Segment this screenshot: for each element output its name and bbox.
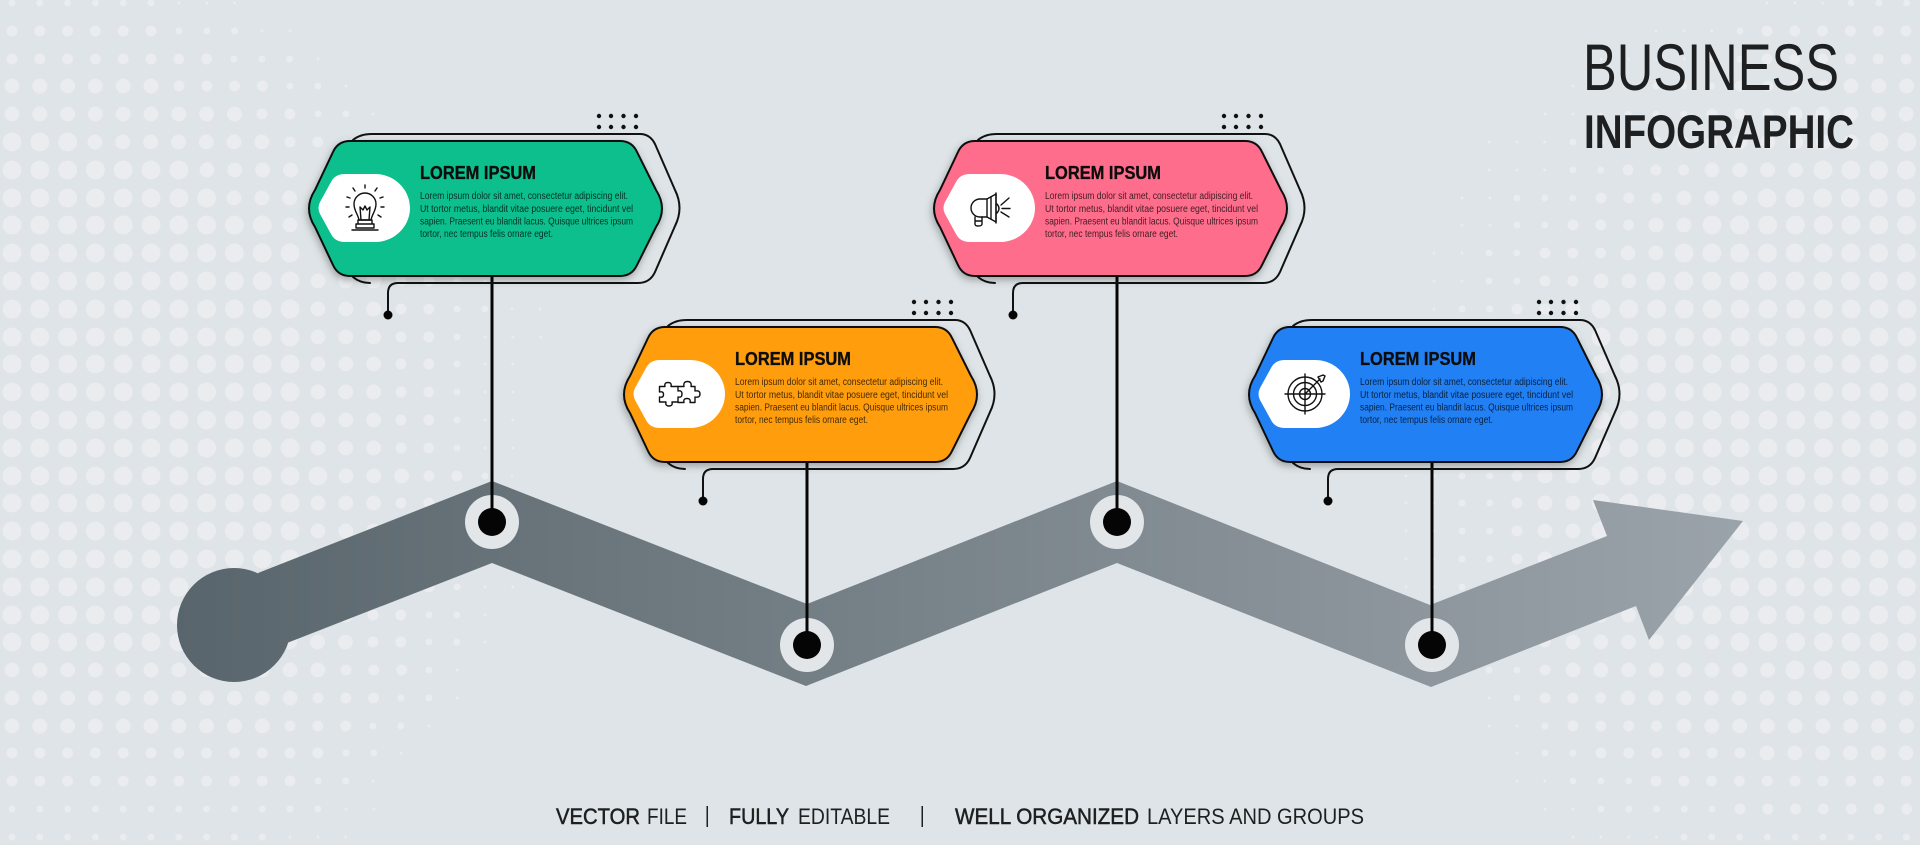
footer tagline: WELL ORGANIZED [955, 804, 1139, 829]
milestone 4 marker [1405, 462, 1459, 672]
icon: target [1285, 374, 1325, 414]
icon: puzzle [660, 382, 700, 406]
description: sapien. Praesent eu blandit lacus. Quisque ultrices ipsum [735, 402, 948, 414]
description: sapien. Praesent eu blandit lacus. Quisque ultrices ipsum [420, 216, 633, 228]
panel: orange card [624, 300, 994, 506]
description: Ut tortor metus, blandit vitae posuere eget, tincidunt vel [1045, 204, 1258, 215]
heading: LOREM IPSUM [735, 349, 851, 369]
panel: pink card [934, 114, 1304, 320]
heading: LOREM IPSUM [1360, 349, 1476, 369]
description: tortor, nec tempus felis ornare eget. [735, 415, 868, 426]
icon: light bulb [346, 185, 384, 230]
footer tagline: LAYERS AND GROUPS [1147, 804, 1364, 829]
icon: megaphone [971, 193, 1010, 226]
description: tortor, nec tempus felis ornare eget. [1045, 229, 1178, 240]
heading: LOREM IPSUM [420, 163, 536, 183]
heading: LOREM IPSUM [1045, 163, 1161, 183]
description: sapien. Praesent eu blandit lacus. Quisque ultrices ipsum [1360, 402, 1573, 414]
title: BUSINESS [1583, 30, 1839, 104]
footer tagline: VECTOR [556, 804, 640, 829]
description: Lorem ipsum dolor sit amet, consectetur adipiscing elit. [1360, 377, 1568, 388]
description: Ut tortor metus, blandit vitae posuere eget, tincidunt vel [735, 390, 948, 401]
description [420, 191, 633, 240]
milestone 3 marker [1090, 276, 1144, 549]
description [735, 377, 948, 426]
footer tagline: FILE [647, 804, 687, 829]
zigzag arrow [177, 481, 1743, 687]
description [1045, 191, 1258, 240]
description: tortor, nec tempus felis ornare eget. [420, 229, 553, 240]
description: Lorem ipsum dolor sit amet, consectetur adipiscing elit. [735, 377, 943, 388]
footer tagline: EDITABLE [798, 804, 890, 829]
milestone 2 marker [780, 462, 834, 672]
description: Ut tortor metus, blandit vitae posuere eget, tincidunt vel [1360, 390, 1573, 401]
description [1360, 377, 1573, 426]
title [1583, 30, 1854, 158]
title: INFOGRAPHIC [1584, 105, 1854, 158]
description: Ut tortor metus, blandit vitae posuere eget, tincidunt vel [420, 204, 633, 215]
description: tortor, nec tempus felis ornare eget. [1360, 415, 1493, 426]
description: Lorem ipsum dolor sit amet, consectetur adipiscing elit. [420, 191, 628, 202]
footer tagline: FULLY [729, 804, 789, 829]
footer tagline [556, 804, 1364, 829]
panel: green card [309, 114, 680, 320]
panel: blue card [1249, 300, 1620, 506]
description: Lorem ipsum dolor sit amet, consectetur adipiscing elit. [1045, 191, 1253, 202]
milestone 1 marker [465, 276, 519, 549]
description: sapien. Praesent eu blandit lacus. Quisque ultrices ipsum [1045, 216, 1258, 228]
